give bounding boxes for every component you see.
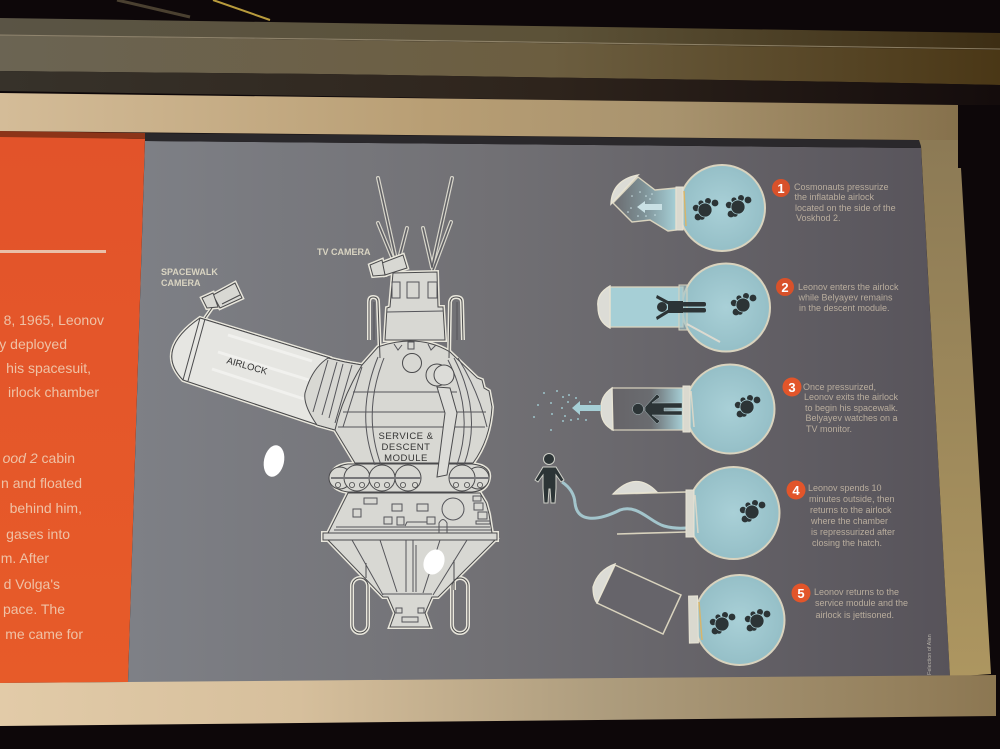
air particles [533,390,591,431]
airlock tube [610,287,683,327]
inner door [691,391,694,427]
module label [378,431,434,464]
cosmonaut [735,395,760,417]
label: TV camera: TV CAMERA [317,247,371,257]
figure: Leonov on spacewalk [535,454,564,503]
module label: MODULE [384,453,428,464]
text block: mission narrative: behind him, [10,500,82,516]
caption: the inflatable airlock [794,192,875,202]
cosmonauts [693,195,751,220]
airlock label: AIRLOCK [225,355,269,378]
spherical tanks [329,465,489,491]
caption [814,587,908,620]
lower cone details [352,540,467,622]
badge [792,584,810,602]
upper rail [0,18,1000,105]
caption: returns to the airlock [810,505,892,515]
text block: mission narrative: his spacesuit, [6,360,91,376]
caption: minutes outside, then [809,494,895,504]
badge: 4 [792,483,800,498]
tether [562,482,686,528]
badge: 1 [777,181,785,196]
airlock collar [305,358,362,430]
caption: Cosmonauts pressurize [794,182,889,192]
inner door [699,602,702,640]
cosmonaut [740,500,765,522]
text block: mission narrative: me came for [5,626,83,642]
label: spacewalk camera: CAMERA [161,278,201,288]
caption [803,382,899,434]
badge [782,378,802,396]
caption [794,182,896,223]
caption: closing the hatch. [812,538,882,548]
caption: service module and the [815,598,908,608]
airlock cap [598,286,610,328]
inner door [695,495,698,533]
spacecraft silhouette [172,255,497,633]
frame: top bar [0,93,958,140]
air particles [627,191,656,217]
airlock cap [593,564,615,603]
step 5: airlock jettisoned [593,564,908,665]
badge [776,278,794,296]
frame: right bar [919,140,991,677]
caption: while Belyayev remains [798,292,893,302]
text block: mission narrative: gases into [6,526,70,542]
module structure lines [313,282,487,465]
caption: located on the side of the [795,203,896,213]
text block: mission narrative: irlock chamber [8,384,99,400]
hatch [689,596,698,643]
text block: mission narrative: m. After [1,550,49,566]
figure: Leonov [656,295,706,320]
text block: mission narrative [0,312,104,642]
air arrow [572,401,601,415]
heading rule [0,250,106,253]
caption: Belyayev watches on a [806,413,898,423]
capsule [679,165,765,251]
caption: airlock is jettisoned. [816,610,894,620]
spacewalk camera detail [222,295,240,304]
step 2: Leonov enters airlock [598,264,899,352]
text block: mission narrative: y deployed [0,336,67,352]
cosmonauts [710,609,770,634]
airlock cap [613,481,657,494]
hatch [686,490,694,537]
module label: SERVICE & [378,431,434,442]
text block: mission narrative: n and floated [1,475,82,491]
caption: Leonov returns to the [814,587,899,597]
step 3: Leonov exits [533,364,899,454]
badge: 5 [797,586,805,601]
caption: Leonov exits the airlock [804,392,899,402]
airlock cap [611,175,638,204]
caption: in the descent module. [799,303,890,313]
caption: TV monitor. [806,424,852,434]
inner door [684,191,686,226]
caption [798,282,899,313]
hatch [676,187,683,230]
text block: mission narrative: 8, 1965, Leonov [4,312,104,328]
caption: Leonov enters the airlock [798,282,899,292]
step 1: inflate airlock [611,165,896,251]
text block: mission narrative: d Volga's [4,576,60,592]
text block: mission narrative: ood 2 cabin [3,450,75,466]
air arrow [637,201,662,213]
equipment section details [334,496,491,533]
airlock walls [613,492,686,534]
cosmonaut [731,293,756,315]
label: spacewalk camera [161,267,218,288]
caption [808,483,895,548]
badge [786,480,806,500]
module label: DESCENT [382,442,430,453]
step 4: spacewalk and return [535,454,895,559]
caption: to begin his spacewalk. [805,403,898,413]
airlock tube [612,388,683,430]
panel: orange text column [0,136,145,683]
capsule [694,575,784,665]
caption: is repressurized after [811,527,895,537]
airlock cap [601,388,613,430]
badge [772,179,790,197]
figure: Leonov [632,394,682,424]
capsule [682,264,770,352]
capsule [688,467,780,559]
badge: 2 [781,280,789,295]
antennas [378,178,452,270]
photo credit: Felection of Alan [927,634,933,675]
airlock cylinder [172,318,330,425]
badge: 3 [788,380,796,395]
caption: Leonov spends 10 [808,483,882,493]
text block: mission narrative: pace. The [3,601,65,617]
crumpled airlock [613,177,676,231]
caption: where the chamber [810,516,888,526]
hatch [679,285,687,330]
jettisoned airlock [597,565,681,634]
portholes and strap [402,354,457,477]
label: spacewalk camera: SPACEWALK [161,267,218,277]
caption: Voskhod 2. [796,213,841,223]
panel: grey diagram area [128,141,950,683]
open inner door [687,324,720,342]
shadow under frame [0,131,921,148]
frame: bottom bar [0,675,996,726]
ceiling struts [117,0,270,20]
capsule [686,364,774,454]
caption: Once pressurized, [803,382,876,392]
hatch [683,386,690,432]
diagram: Voskhod 2 spacecraft [172,178,497,633]
glare spots [261,443,449,578]
